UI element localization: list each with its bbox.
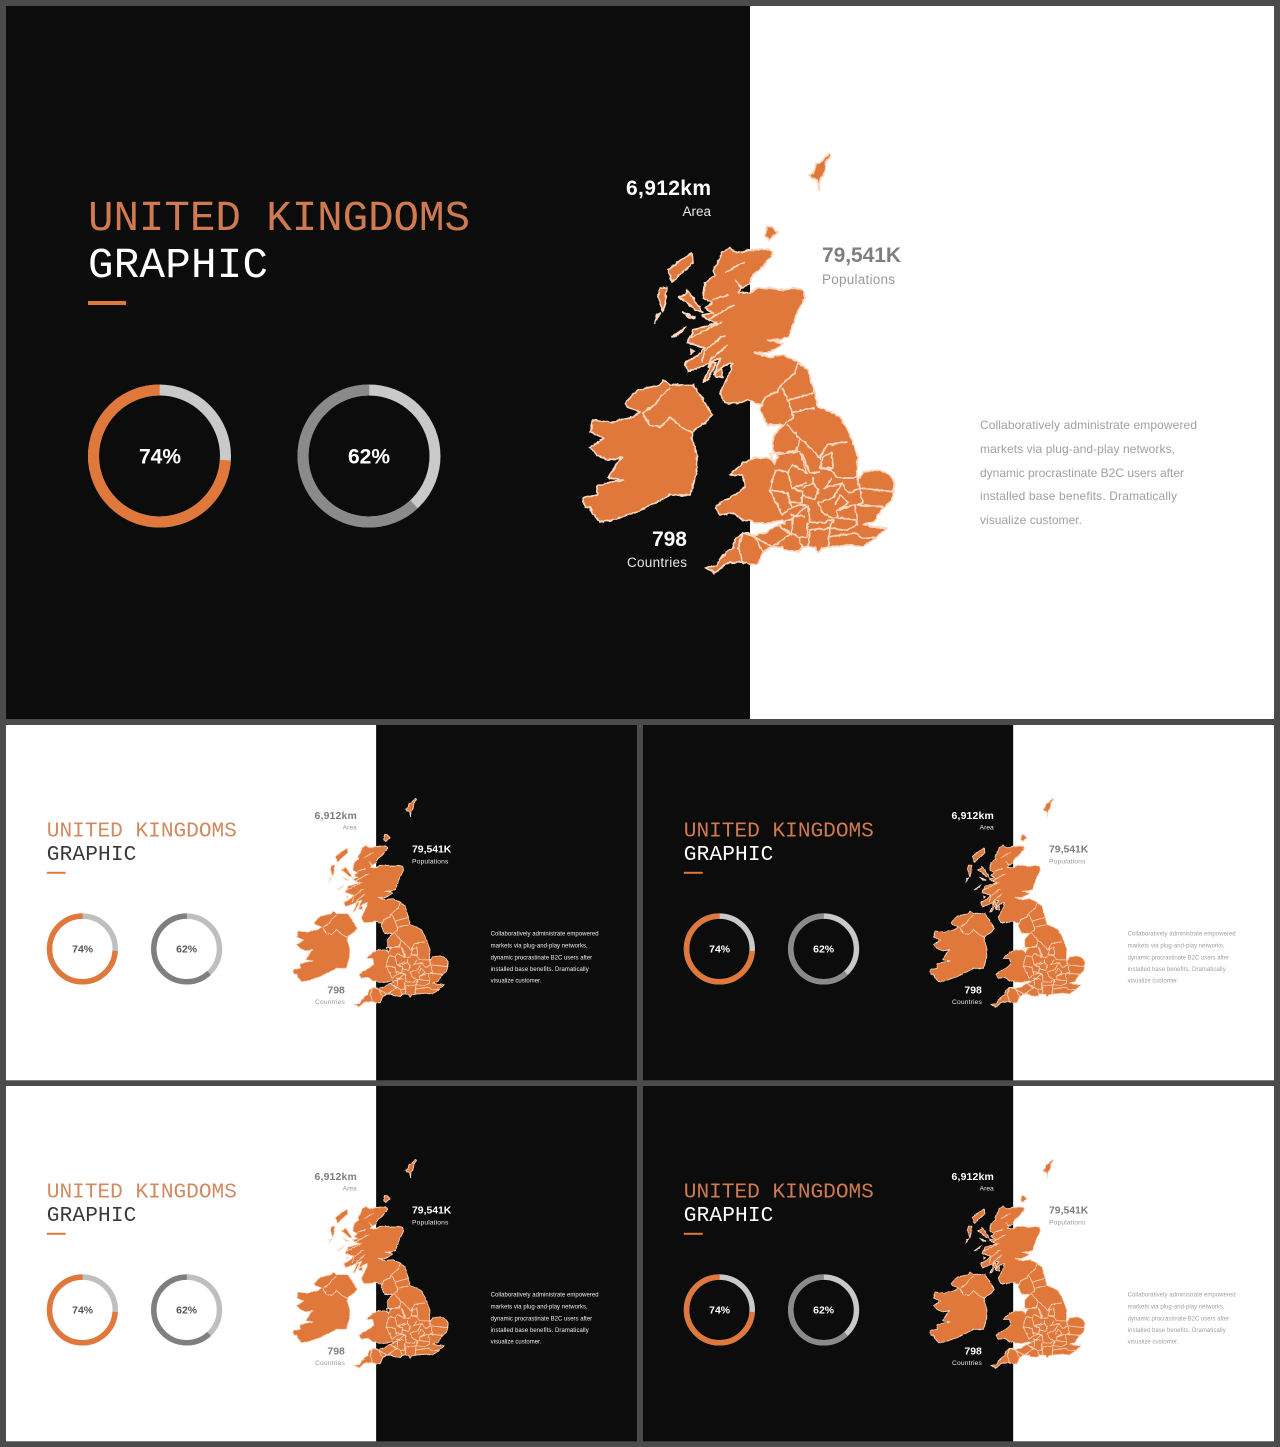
stat: populations: 79,541K bbox=[412, 1205, 452, 1216]
stat: countries: Countries bbox=[627, 555, 687, 570]
donut: 74%: 74% bbox=[72, 1306, 93, 1317]
text block: installed base benefits. Dramatically bbox=[1128, 967, 1226, 973]
stat: countries: Countries bbox=[315, 999, 346, 1006]
stat: countries: 798 bbox=[327, 986, 345, 997]
black half bbox=[376, 1086, 637, 1441]
donut: 74%: 74% bbox=[72, 945, 93, 956]
stat: area: Area bbox=[343, 824, 357, 831]
map of UK bbox=[583, 153, 895, 573]
text block: dynamic procrastinate B2C users after bbox=[1128, 1316, 1229, 1322]
stat: populations bbox=[412, 1205, 452, 1226]
text block: dynamic procrastinate B2C users after bbox=[980, 466, 1184, 480]
stat: countries bbox=[952, 986, 983, 1006]
donut: 62% bbox=[140, 903, 233, 995]
stat: countries: 798 bbox=[964, 986, 982, 997]
text block: Collaboratively administrate empowered bbox=[491, 931, 599, 937]
donut: 74% bbox=[89, 386, 230, 526]
stat: countries: Countries bbox=[952, 1360, 983, 1367]
text block: visualize customer. bbox=[491, 1340, 542, 1346]
stat: populations: 79,541K bbox=[1049, 1205, 1089, 1216]
map of UK bbox=[293, 1159, 448, 1368]
donut: 74% bbox=[685, 1275, 754, 1345]
text block: installed base benefits. Dramatically bbox=[980, 489, 1177, 503]
donut: 74%: 74% bbox=[709, 945, 730, 956]
stat: populations: Populations bbox=[1049, 858, 1086, 865]
stat: countries: Countries bbox=[952, 999, 983, 1006]
stat: populations bbox=[822, 244, 901, 287]
donut: 62% bbox=[777, 903, 870, 995]
donut: 74% bbox=[48, 914, 117, 984]
title: UNITED KINGDOMS bbox=[684, 819, 874, 843]
stat: populations: 79,541K bbox=[822, 244, 901, 267]
donut: 74%: 74% bbox=[709, 1306, 730, 1317]
text block bbox=[980, 418, 1197, 527]
stat: area: 6,912km bbox=[315, 811, 357, 822]
map of UK bbox=[930, 798, 1085, 1007]
stat: countries bbox=[952, 1347, 983, 1367]
white half bbox=[6, 1086, 376, 1441]
title: UNITED KINGDOMS bbox=[684, 1180, 874, 1204]
white half bbox=[6, 725, 376, 1080]
title bbox=[47, 1180, 237, 1228]
text block: visualize customer. bbox=[1128, 1340, 1179, 1346]
title underline bbox=[47, 1233, 66, 1235]
text block: dynamic procrastinate B2C users after bbox=[1128, 955, 1229, 961]
donut: 62% bbox=[140, 1264, 233, 1356]
stat: area: Area bbox=[682, 204, 711, 219]
white half bbox=[750, 6, 1274, 719]
stat: area: 6,912km bbox=[315, 1172, 357, 1183]
black half bbox=[643, 1086, 1013, 1441]
text block: markets via plug-and-play networks, bbox=[1128, 1304, 1225, 1310]
stat: populations: Populations bbox=[1049, 1219, 1086, 1226]
stat: countries bbox=[315, 1347, 346, 1367]
title bbox=[684, 819, 874, 867]
text block: Collaboratively administrate empowered bbox=[980, 418, 1197, 432]
text block: Collaboratively administrate empowered bbox=[491, 1292, 599, 1298]
text block bbox=[491, 1292, 599, 1346]
stat: populations bbox=[1049, 844, 1089, 865]
stat: populations: 79,541K bbox=[1049, 844, 1089, 855]
title: UNITED KINGDOMS bbox=[88, 195, 470, 243]
donut: 74%: 74% bbox=[139, 446, 181, 468]
stat: area bbox=[952, 811, 994, 831]
text block: Collaboratively administrate empowered bbox=[1128, 1292, 1236, 1298]
text block bbox=[1128, 931, 1236, 985]
stat: populations: 79,541K bbox=[412, 844, 452, 855]
text block bbox=[1128, 1292, 1236, 1346]
text block bbox=[491, 931, 599, 985]
black half bbox=[643, 725, 1013, 1080]
black half bbox=[6, 6, 750, 719]
title: GRAPHIC bbox=[684, 843, 773, 867]
donut: 62%: 62% bbox=[813, 945, 834, 956]
title underline bbox=[47, 872, 66, 874]
donut: 62%: 62% bbox=[813, 1306, 834, 1317]
black half bbox=[376, 725, 637, 1080]
panel: slide 5 (black left) bbox=[643, 1086, 1274, 1441]
text block: dynamic procrastinate B2C users after bbox=[491, 955, 592, 961]
stat: area: 6,912km bbox=[952, 1172, 994, 1183]
text block: installed base benefits. Dramatically bbox=[1128, 1328, 1226, 1334]
stat: populations bbox=[1049, 1205, 1089, 1226]
title bbox=[47, 819, 237, 867]
stat: area bbox=[315, 811, 357, 831]
text block: markets via plug-and-play networks, bbox=[1128, 943, 1225, 949]
stat: populations: Populations bbox=[412, 858, 449, 865]
stat: area bbox=[315, 1172, 357, 1192]
title: GRAPHIC bbox=[47, 843, 136, 867]
text block: Collaboratively administrate empowered bbox=[1128, 931, 1236, 937]
text block: installed base benefits. Dramatically bbox=[491, 967, 589, 973]
title: GRAPHIC bbox=[88, 242, 268, 290]
stat: countries: 798 bbox=[964, 1347, 982, 1358]
stat: countries: Countries bbox=[315, 1360, 346, 1367]
title: UNITED KINGDOMS bbox=[47, 1180, 237, 1204]
panel: slide 3 (black left) bbox=[643, 725, 1274, 1080]
map of UK bbox=[930, 1159, 1085, 1368]
title bbox=[684, 1180, 874, 1228]
text block: dynamic procrastinate B2C users after bbox=[491, 1316, 592, 1322]
stat: countries bbox=[315, 986, 346, 1006]
donut: 62% bbox=[276, 363, 462, 549]
stat: area: Area bbox=[980, 824, 994, 831]
stat: area: 6,912km bbox=[626, 177, 711, 200]
stat: populations: Populations bbox=[822, 272, 895, 287]
stat: populations bbox=[412, 844, 452, 865]
text block: markets via plug-and-play networks, bbox=[491, 943, 588, 949]
donut: 62%: 62% bbox=[176, 945, 197, 956]
stat: countries: 798 bbox=[652, 528, 687, 551]
title: GRAPHIC bbox=[47, 1204, 136, 1228]
stat: countries: 798 bbox=[327, 1347, 345, 1358]
text block: markets via plug-and-play networks, bbox=[491, 1304, 588, 1310]
donut: 62%: 62% bbox=[348, 446, 390, 468]
title: GRAPHIC bbox=[684, 1204, 773, 1228]
text block: visualize customer. bbox=[491, 979, 542, 985]
title underline bbox=[684, 1233, 703, 1235]
donut: 62% bbox=[777, 1264, 870, 1356]
stat: countries bbox=[627, 528, 687, 570]
stat: area: Area bbox=[343, 1185, 357, 1192]
stat: area: 6,912km bbox=[952, 811, 994, 822]
white half bbox=[1013, 1086, 1274, 1441]
text block: visualize customer. bbox=[1128, 979, 1179, 985]
donut: 62%: 62% bbox=[176, 1306, 197, 1317]
title: UNITED KINGDOMS bbox=[47, 819, 237, 843]
stat: area bbox=[626, 177, 711, 219]
stat: area bbox=[952, 1172, 994, 1192]
stat: area: Area bbox=[980, 1185, 994, 1192]
text block: installed base benefits. Dramatically bbox=[491, 1328, 589, 1334]
title bbox=[88, 195, 470, 290]
panel: slide 2 (white left) bbox=[6, 725, 637, 1080]
donut: 74% bbox=[685, 914, 754, 984]
title underline bbox=[88, 301, 126, 305]
panel: slide 4 (white left) bbox=[6, 1086, 637, 1441]
stat: populations: Populations bbox=[412, 1219, 449, 1226]
donut: 74% bbox=[48, 1275, 117, 1345]
map of UK bbox=[293, 798, 448, 1007]
text block: visualize customer. bbox=[980, 513, 1082, 527]
text block: markets via plug-and-play networks, bbox=[980, 442, 1175, 456]
white half bbox=[1013, 725, 1274, 1080]
panel: main slide bbox=[6, 6, 1274, 719]
title underline bbox=[684, 872, 703, 874]
